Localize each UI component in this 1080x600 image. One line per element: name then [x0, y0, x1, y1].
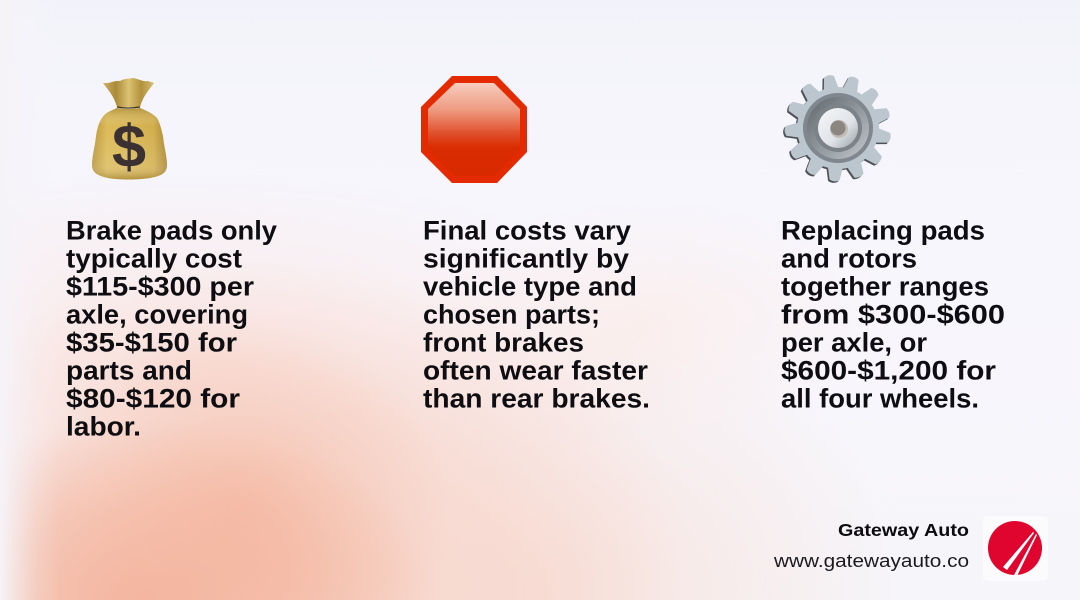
text: replacing pads and rotors: Replacing pads [781, 216, 985, 246]
text: final costs vary: vehicle type and [423, 272, 637, 302]
text: final costs vary: chosen parts; [423, 300, 600, 330]
text: replacing pads and rotors: and rotors [781, 244, 917, 274]
text: final costs vary: front brakes [423, 328, 584, 358]
text: final costs vary: Final costs vary [423, 216, 631, 246]
icon: money bag [92, 78, 167, 180]
text: brake pads only: axle, covering [66, 300, 248, 330]
text: final costs vary: significantly by [423, 244, 629, 274]
text: brake pads only: labor. [66, 412, 141, 442]
text: replacing pads and rotors: $600-$1,200 for [781, 356, 996, 386]
brand name: Gateway Auto [838, 520, 969, 540]
text: final costs vary [423, 216, 650, 414]
text: brake pads only [66, 216, 277, 442]
text: brake pads only: $115-$300 per [66, 272, 254, 302]
dollar sign: $ [112, 113, 146, 180]
text: replacing pads and rotors: from $300-$600 [781, 300, 1005, 330]
text: replacing pads and rotors: all four wheels. [781, 384, 979, 414]
text: brake pads only: $80-$120 for [66, 384, 240, 414]
text: replacing pads and rotors: per axle, or [781, 328, 927, 358]
text: brake pads only: Brake pads only [66, 216, 277, 246]
icon: gear [783, 74, 892, 183]
text: final costs vary: often wear faster [423, 356, 648, 386]
text: final costs vary: than rear brakes. [423, 384, 650, 414]
website url: www.gatewayauto.co [773, 551, 969, 571]
logo [983, 516, 1048, 581]
text: replacing pads and rotors: together ranges [781, 272, 989, 302]
text: brake pads only: $35-$150 for [66, 328, 237, 358]
text: replacing pads and rotors [781, 216, 1005, 414]
text: brake pads only: typically cost [66, 244, 242, 274]
icon: stop sign [421, 76, 527, 183]
text: brake pads only: parts and [66, 356, 192, 386]
